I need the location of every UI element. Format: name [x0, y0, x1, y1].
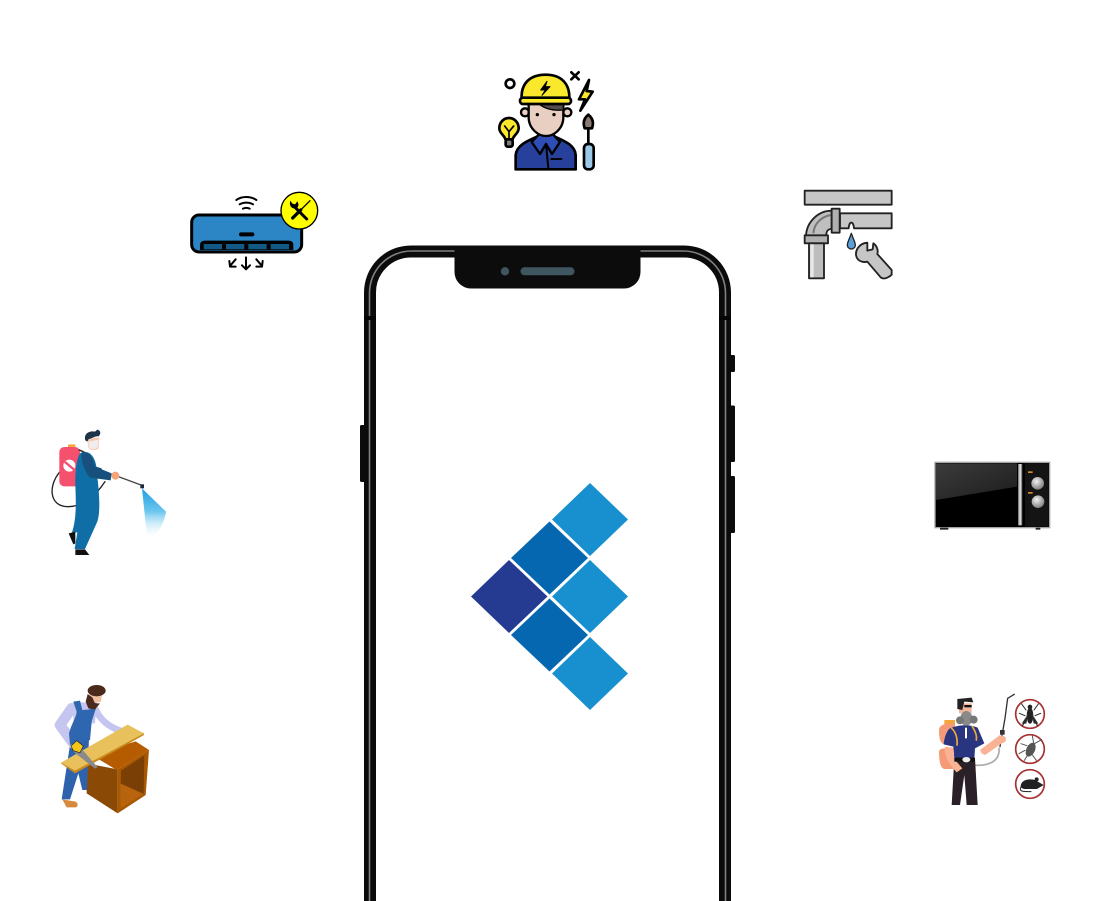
rat icon: [1016, 770, 1044, 798]
wooden board: [61, 725, 144, 773]
saw: [71, 741, 98, 769]
notch: [454, 246, 640, 288]
carpenter figure: [60, 685, 129, 807]
cabinet: [87, 741, 149, 813]
side buttons: [360, 355, 735, 533]
icon: electrician: [499, 72, 594, 169]
icon: pest control worker: [939, 694, 1044, 805]
icon: carpenter sawing wood: [60, 685, 149, 813]
logo: [471, 483, 628, 710]
icon: air conditioner repair: [192, 192, 318, 269]
cockroach icon: [1016, 735, 1044, 763]
phone frame: [360, 246, 735, 901]
phone body outline: [370, 252, 725, 901]
icon: pest sprayer worker: [52, 430, 166, 555]
fly icon: [1016, 700, 1044, 728]
icon: plumbing pipe and wrench: [805, 191, 892, 278]
icon: microwave oven: [935, 462, 1050, 530]
